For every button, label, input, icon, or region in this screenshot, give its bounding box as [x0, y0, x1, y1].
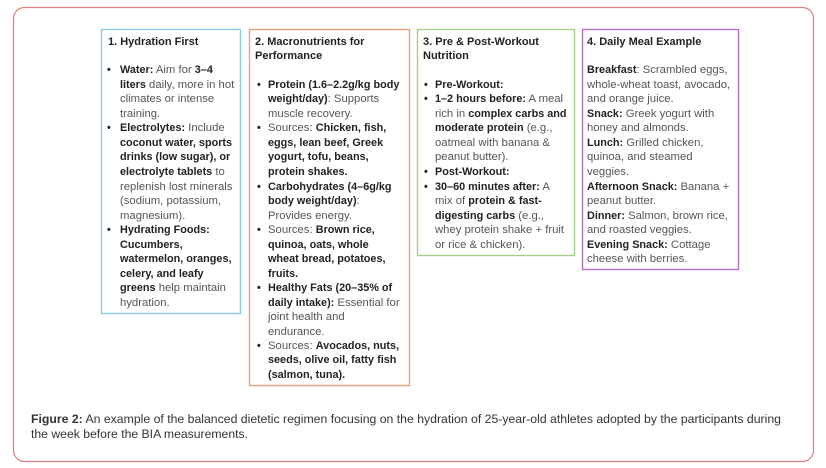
caption: the week before the BIA measurements. [31, 427, 248, 441]
list: hydration items: greens help maintain [120, 282, 226, 294]
list: macronutrient items: weight/day): Supports [267, 93, 380, 105]
list: macronutrient items: • [257, 282, 261, 294]
list: workout items: Pre-Workout: [435, 79, 503, 91]
list: hydration items: Cucumbers, [120, 239, 183, 251]
list: macronutrient items: wheat bread, potatoes, [267, 253, 386, 265]
list: meals: Snack: Greek yogurt with [587, 108, 714, 120]
list: macronutrient items: joint health and [267, 311, 345, 323]
list: macronutrient items: seeds, olive oil, fatty fish [268, 354, 396, 366]
heading: daily meal example: 4. Daily Meal Example [587, 36, 701, 48]
list: hydration items: magnesium). [120, 210, 185, 222]
panel: hydration first [102, 30, 240, 314]
list: macronutrient items: fruits. [268, 268, 298, 280]
list: hydration items: electrolyte tablets to [120, 166, 225, 178]
heading: hydration first: 1. Hydration First [108, 36, 199, 48]
list: hydration items: liters daily, more in hot [120, 79, 235, 91]
list: macronutrient items: protein shakes. [268, 166, 348, 178]
list: workout items [424, 79, 567, 251]
panel: macronutrients [250, 30, 410, 386]
heading: pre and post workout: Nutrition [423, 50, 469, 62]
list: macronutrient items: Healthy Fats (20–35% of [268, 282, 393, 294]
heading: pre and post workout [423, 36, 539, 62]
list: workout items: whey protein shake + fruit [434, 224, 565, 236]
list: meals: Breakfast: Scrambled eggs, [587, 64, 728, 76]
list: meals: Afternoon Snack: Banana + [587, 181, 730, 193]
list: meals: and roasted veggies. [587, 224, 692, 236]
heading: macronutrients [255, 36, 365, 62]
list: hydration items: climates or intense [120, 93, 214, 105]
list: macronutrient items: Sources: Chicken, fish, [268, 122, 386, 134]
list: workout items: rich in complex carbs and [435, 108, 567, 120]
list: macronutrient items: Provides energy. [268, 210, 352, 222]
list: macronutrient items: Sources: Brown rice, [268, 224, 375, 236]
list: hydration items [107, 64, 235, 309]
list: workout items: 30–60 minutes after: A [435, 181, 550, 193]
list: macronutrient items [257, 79, 400, 381]
list: workout items: or rice & chicken). [435, 239, 525, 251]
caption: Figure 2: An example of the balanced dietetic regimen focusing on the hydration of 25-year-old athletes adopted by the participants during [31, 412, 781, 426]
list: hydration items: hydration. [120, 297, 170, 309]
list: macronutrient items: • [257, 122, 261, 134]
list: workout items: oatmeal with banana & [435, 137, 550, 149]
list: workout items: peanut butter). [435, 151, 508, 163]
list: macronutrient items: • [257, 181, 261, 193]
list: macronutrient items: Carbohydrates (4–6g/kg [268, 181, 392, 193]
list: hydration items: Hydrating Foods: [120, 224, 210, 236]
heading: pre and post workout: 3. Pre & Post-Workout [423, 36, 539, 48]
list: hydration items: Electrolytes: Include [120, 122, 225, 134]
list: macronutrient items: muscle recovery. [268, 108, 353, 120]
list: hydration items: watermelon, oranges, [119, 253, 231, 265]
list: meals: peanut butter. [587, 195, 656, 207]
list: macronutrient items: daily intake): Essential for [268, 297, 400, 309]
list: workout items: • [424, 93, 428, 105]
list: hydration items: • [107, 224, 111, 236]
list: meals: cheese with berries. [587, 253, 687, 265]
list: macronutrient items: • [257, 79, 261, 91]
list: macronutrient items: eggs, lean beef, Greek [268, 137, 384, 149]
list: workout items: mix of protein & fast- [435, 195, 542, 207]
list: hydration items: • [107, 64, 111, 76]
list: meals: veggies. [587, 166, 629, 178]
list: macronutrient items: (salmon, tuna). [268, 369, 345, 381]
list: hydration items: training. [120, 108, 160, 120]
list: workout items: digesting carbs (e.g., [435, 210, 544, 222]
list: meals: whole-wheat toast, avocado, [586, 79, 730, 91]
list: hydration items: Water: Aim for 3–4 [120, 64, 213, 76]
list: workout items: • [424, 79, 428, 91]
list: macronutrient items: • [257, 340, 261, 352]
list: workout items: 1–2 hours before: A meal [435, 93, 563, 105]
list: workout items: • [424, 166, 428, 178]
heading: macronutrients: Performance [255, 50, 322, 62]
caption [31, 412, 781, 441]
list: workout items: Post-Workout: [435, 166, 510, 178]
list: meals: Dinner: Salmon, brown rice, [587, 210, 728, 222]
list: meals: and orange juice. [587, 93, 674, 105]
list: macronutrient items: Protein (1.6–2.2g/kg body [268, 79, 399, 91]
list: meals: Lunch: Grilled chicken, [587, 137, 704, 149]
list: hydration items: (sodium, potassium, [120, 195, 221, 207]
panel: pre and post workout [418, 30, 574, 256]
list: macronutrient items: • [257, 224, 261, 236]
list: meals: quinoa, and steamed [587, 151, 693, 163]
list: hydration items: replenish lost minerals [120, 181, 233, 193]
list: macronutrient items: Sources: Avocados, nuts, [268, 340, 399, 352]
list: hydration items: celery, and leafy [120, 268, 204, 280]
list: macronutrient items: yogurt, tofu, beans, [268, 151, 369, 163]
list: macronutrient items: endurance. [268, 326, 325, 338]
list: workout items: moderate protein (e.g., [435, 122, 552, 134]
list: meals [586, 64, 730, 265]
list: macronutrient items: quinoa, oats, whole [268, 239, 369, 251]
list: hydration items: • [107, 122, 111, 134]
list: meals: Evening Snack: Cottage [587, 239, 710, 251]
list: hydration items: coconut water, sports [120, 137, 232, 149]
panel: daily meal example [582, 30, 738, 270]
list: meals: honey and almonds. [587, 122, 689, 134]
heading: macronutrients: 2. Macronutrients for [255, 36, 365, 48]
list: macronutrient items: body weight/day): [268, 195, 360, 207]
list: workout items: • [424, 181, 428, 193]
list: hydration items: drinks (low sugar), or [120, 151, 231, 163]
